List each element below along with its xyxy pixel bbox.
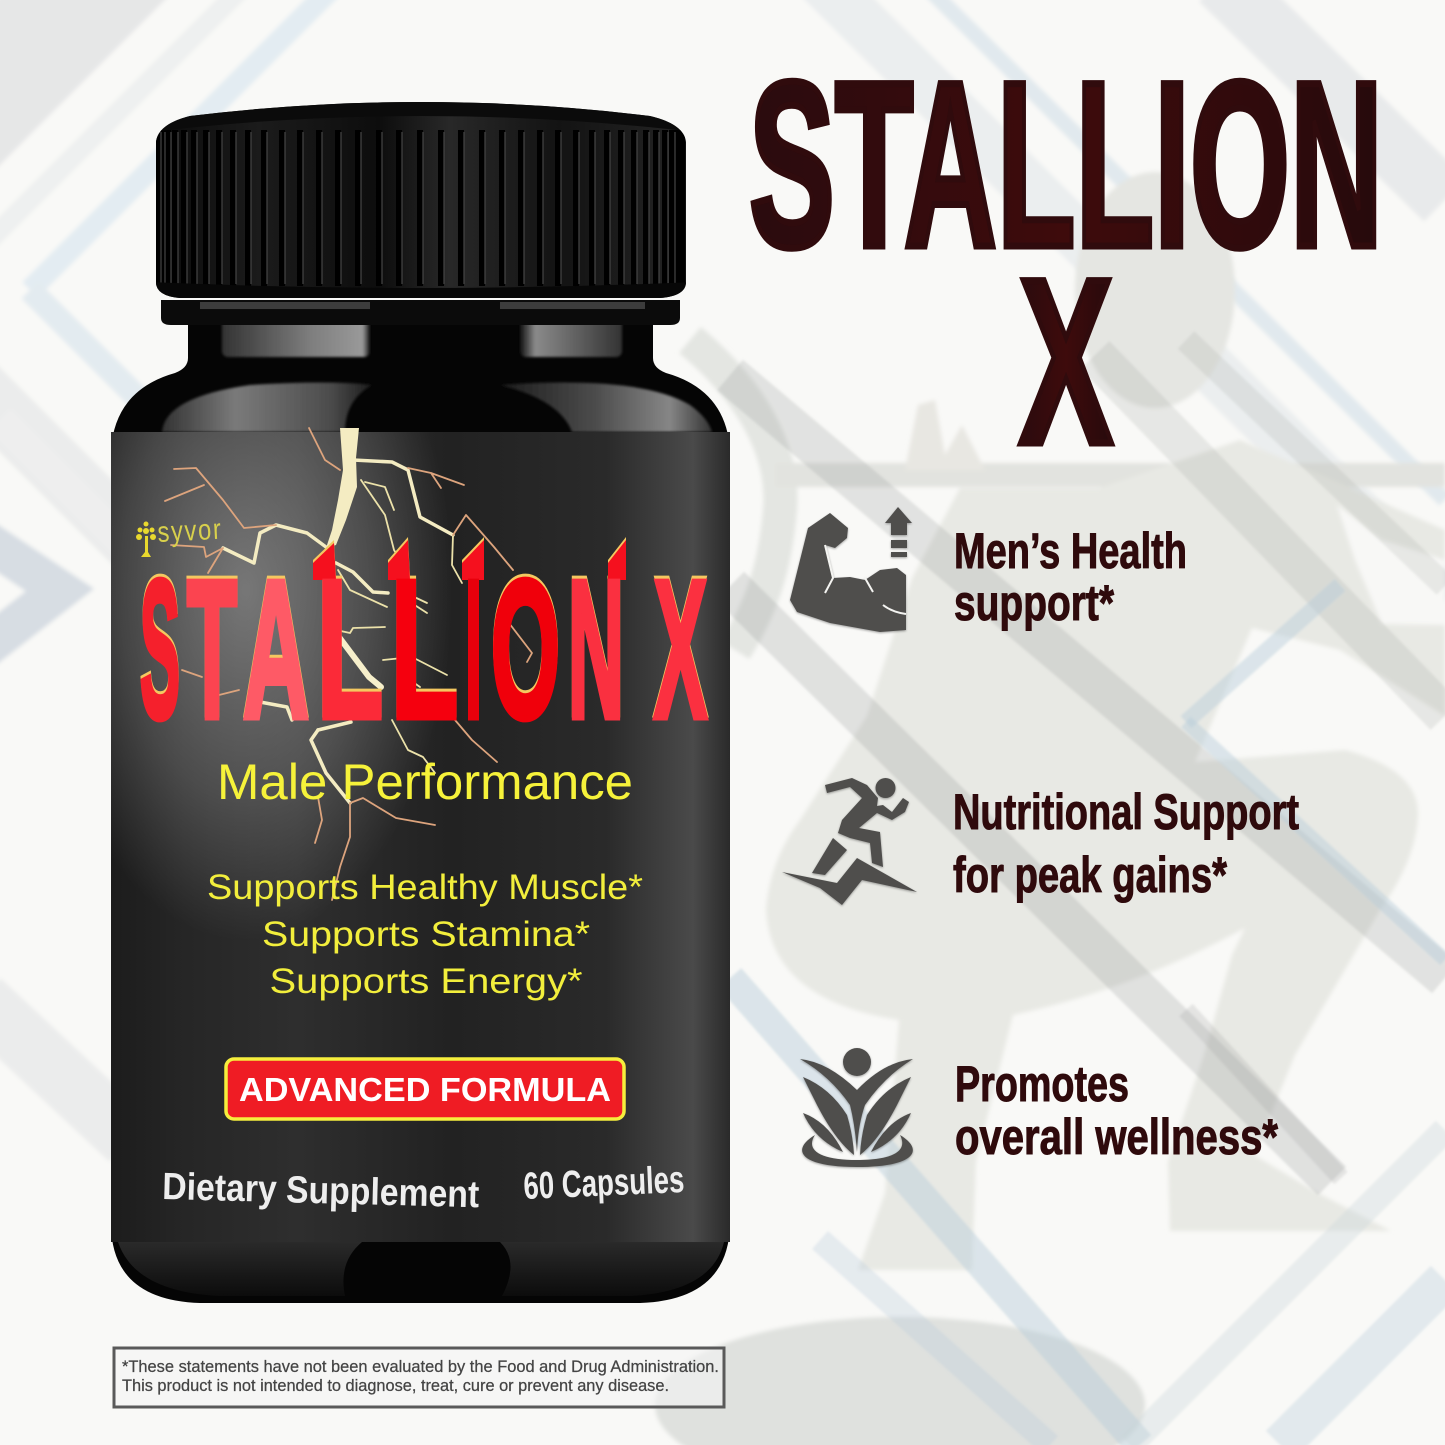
lightning artwork [165, 428, 532, 900]
syvor logo: syvor [157, 514, 223, 549]
background diagonal bands [730, 340, 1445, 1445]
benefit text: nutritional support: for peak gains* [953, 847, 1227, 903]
bottle body [111, 322, 730, 1303]
icon: wellness figure [800, 1048, 913, 1167]
disclaimer [114, 1348, 724, 1407]
benefit text: nutritional support: Nutritional Support [953, 784, 1299, 840]
title [749, 33, 1383, 494]
name word: O [491, 540, 560, 759]
product name: N [568, 540, 624, 759]
benefit lines: Supports Healthy Muscle* [207, 868, 643, 907]
product name [140, 540, 707, 759]
product bottle [111, 95, 730, 1303]
decorative letter spikes [313, 540, 626, 580]
label: X [654, 540, 707, 759]
dietary supplement: Dietary Supplement [162, 1166, 480, 1216]
syvor logo [136, 514, 223, 557]
benefit text: overall wellness [955, 1056, 1278, 1165]
icon: tree [136, 522, 156, 557]
disclaimer: *These statements have not been evaluated by the Food and Drug Administration. [122, 1357, 719, 1376]
benefit text: men's health: Men’s Health [954, 523, 1187, 579]
label [111, 428, 730, 1242]
benefit text: men's health: support* [954, 575, 1114, 631]
benefit text: men's health [954, 523, 1187, 631]
bottle collar [161, 300, 680, 325]
benefit lines: Supports Stamina* [262, 915, 590, 954]
icon: runner [782, 778, 917, 905]
capsule count: 60 Capsules [523, 1159, 685, 1208]
benefit text: overall wellness: Promotes [955, 1056, 1129, 1112]
benefit lines [207, 868, 643, 1001]
advanced formula badge [226, 1059, 624, 1119]
benefit text: overall wellness: overall wellness* [955, 1109, 1278, 1165]
bottom highlights [118, 1242, 724, 1296]
background athlete silhouette [655, 172, 1445, 1445]
subtitle: Male Performance [217, 754, 633, 810]
benefit lines: Supports Energy* [270, 962, 583, 1001]
disclaimer: This product is not intended to diagnose, treat, cure or prevent any disease. [122, 1376, 669, 1395]
title: X [1019, 230, 1113, 494]
name word: L [317, 540, 383, 759]
barbell plate [690, 340, 780, 650]
name word: T [187, 540, 237, 759]
name word: S [140, 540, 180, 759]
icon: muscle arm [790, 507, 912, 632]
name word: A [243, 540, 309, 759]
name word: L [391, 540, 458, 759]
name word: I [465, 540, 482, 759]
neck highlights [222, 313, 622, 357]
bottle cap [150, 95, 695, 305]
shoulder highlights [162, 382, 712, 432]
benefit text: nutritional support [953, 784, 1299, 903]
advanced formula badge: ADVANCED FORMULA [239, 1071, 611, 1108]
